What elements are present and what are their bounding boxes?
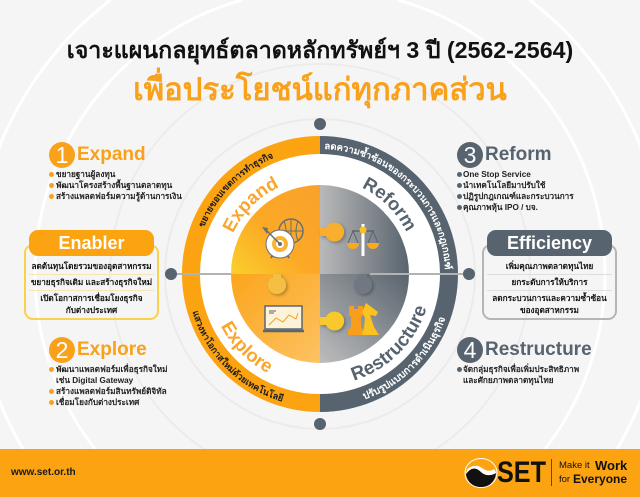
- logo divider: [551, 459, 552, 486]
- word: Explore: Explore: [221, 320, 271, 372]
- logo: tagline: Make it: [559, 460, 590, 471]
- efficiency text rows: [487, 260, 612, 316]
- number badge 4: 4: [464, 337, 476, 363]
- logo: tagline: Everyone: [573, 472, 627, 486]
- number badge 2: 2: [56, 337, 68, 363]
- node: top: [314, 118, 326, 130]
- node: right: [463, 268, 475, 280]
- quadrant bottom-left: [231, 274, 320, 363]
- number badge 2: [49, 337, 75, 363]
- enabler text rows: ขยายธุรกิจเดิม และสร้างธุรกิจใหม่: [31, 278, 152, 287]
- efficiency outline: [482, 244, 617, 320]
- white ring: [200, 154, 440, 394]
- bullet list: reform: นำเทคโนโลยีมาปรับใช้: [463, 181, 545, 190]
- word: Reform: Reform: [362, 176, 414, 232]
- bullet list: restructure: [457, 363, 579, 386]
- bullet list: reform: [457, 170, 574, 212]
- outer ring: grey half: [320, 136, 458, 412]
- efficiency text rows: ยกระดับการให้บริการ: [512, 278, 587, 287]
- footer band: [0, 449, 640, 497]
- ring text: top left: ขยายขอบเขตการทำธุรกิจ: [200, 154, 273, 226]
- outer ring: orange half: [182, 136, 320, 412]
- efficiency header: Efficiency: [507, 233, 592, 253]
- bullet list: restructure: และศักยภาพตลาดทุนไทย: [463, 376, 554, 385]
- icon: chess pieces: [348, 303, 379, 335]
- bullet list: explore: [49, 363, 168, 407]
- bullet list: restructure: จัดกลุ่มธุรกิจเพื่อเพิ่มประสิทธิภาพ: [463, 365, 579, 374]
- panel: reform: [457, 142, 574, 212]
- puzzle knob: top-right into bottom-right: [354, 274, 372, 294]
- number badge 4: [457, 337, 483, 363]
- puzzle knob: top-left into top-right: [320, 223, 344, 242]
- bullet list: expand: สร้างแพลตฟอร์มความรู้ด้านการเงิน: [56, 192, 182, 201]
- ring text: bottom right: ปรับรูปแบบการดำเนินธุรกิจ: [362, 317, 446, 400]
- bullet list: explore: สร้างแพลตฟอร์มสินทรัพย์ดิจิทัล: [56, 387, 167, 396]
- bullet list: expand: ขยายฐานผู้ลงทุน: [56, 170, 115, 179]
- quadrant bottom-right: [320, 274, 409, 363]
- bullet list: reform: คุณภาพหุ้น IPO / บจ.: [463, 203, 538, 212]
- logo: tagline: Work: [595, 458, 627, 473]
- panel: enabler: [24, 230, 159, 320]
- panel: restructure: [457, 337, 592, 386]
- enabler text rows: กับต่างประเทศ: [66, 306, 117, 315]
- icon: target and globe: [262, 219, 303, 258]
- bullet list: explore: พัฒนาแพลตฟอร์มเพื่อธุรกิจใหม่: [56, 365, 168, 374]
- number badge 1: [49, 142, 75, 168]
- word: Expand: Expand: [222, 176, 278, 232]
- puzzle knob: bottom-left into bottom-right: [320, 312, 344, 330]
- ring text: top right: ลดความซ้ำซ้อนของกระบวนการและกฎเกณฑ์: [325, 144, 454, 270]
- title: เจาะแผนกลยุทธ์ตลาดหลักทรัพย์ฯ 3 ปี (2562-2564): [67, 37, 573, 63]
- quadrant top-left: [231, 185, 320, 274]
- node: left: [165, 268, 177, 280]
- enabler outline: [24, 244, 159, 320]
- enabler header: Enabler: [58, 233, 125, 253]
- icon: scales: [347, 224, 379, 256]
- node: bottom: [314, 418, 326, 430]
- bullet list: expand: พัฒนาโครงสร้างพื้นฐานตลาดทุน: [56, 181, 172, 190]
- bullet list: explore: เช่น Digital Gateway: [56, 376, 133, 385]
- heading: Restructure: Restructure: [485, 339, 592, 360]
- connector: right: [370, 273, 469, 275]
- quadrant top-right: [320, 185, 409, 274]
- number badge 3: [457, 142, 483, 168]
- enabler text rows: [29, 261, 154, 315]
- website url: www.set.or.th: [11, 467, 76, 478]
- subtitle: เพื่อประโยชน์แก่ทุกภาคส่วน: [133, 72, 507, 107]
- bullet list: reform: One Stop Service: [463, 170, 531, 179]
- ring text: bottom left: แสวงหาโอกาสใหม่ด้วยเทคโนโลยี: [192, 310, 284, 402]
- efficiency text rows: ลดกระบวนการและความซ้ำซ้อน: [492, 294, 607, 303]
- enabler header: [29, 230, 154, 256]
- enabler text rows: ลดต้นทุนโดยรวมของอุตสาหกรรม: [31, 262, 152, 271]
- enabler text rows: เปิดโอกาสการเชื่อมโยงธุรกิจ: [40, 294, 143, 303]
- efficiency text rows: เพิ่มคุณภาพตลาดทุนไทย: [506, 262, 593, 271]
- bullet list: expand: [49, 170, 182, 202]
- panel: explore: [49, 337, 168, 407]
- panel: efficiency: [482, 230, 617, 320]
- efficiency text rows: ของอุตสาหกรรม: [520, 306, 579, 315]
- logo: tagline: for: [559, 474, 570, 485]
- connector: left: [171, 273, 231, 275]
- number badge 1: 1: [56, 142, 68, 168]
- icon: laptop with chart: [263, 306, 304, 331]
- heading: Explore: Explore: [77, 339, 147, 360]
- logo: SET emblem: [464, 458, 498, 488]
- heading: Expand: Expand: [77, 144, 146, 165]
- word: Restructure: Restructure: [350, 306, 426, 380]
- panel: expand: [49, 142, 182, 202]
- bullet list: explore: เชื่อมโยงกับต่างประเทศ: [56, 398, 139, 407]
- puzzle knob: top-left into bottom-left: [268, 274, 286, 294]
- number badge 3: 3: [464, 142, 476, 168]
- logo: tagline: [559, 458, 628, 486]
- heading: Reform: Reform: [485, 144, 552, 165]
- logo: SET wordmark: SET: [497, 456, 546, 489]
- bullet list: reform: ปฏิรูปกฎเกณฑ์และกระบวนการ: [463, 192, 574, 201]
- efficiency header: [487, 230, 612, 256]
